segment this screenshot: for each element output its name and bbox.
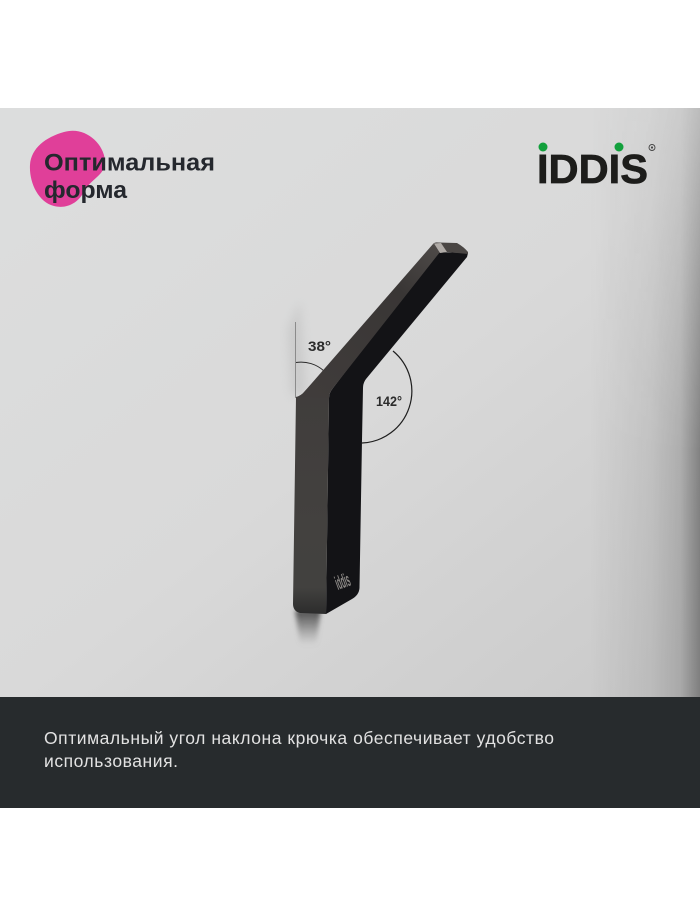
wall photo background xyxy=(0,108,700,697)
title: Оптимальная xyxy=(44,150,215,176)
hook top end cap xyxy=(433,242,468,254)
hook lit diagonal face xyxy=(296,244,440,398)
angle marker: 38 degrees: 38° xyxy=(308,338,331,354)
angle marker: 38 degrees xyxy=(296,322,331,398)
caption text: использования. xyxy=(44,751,178,771)
pink blob behind heading xyxy=(30,131,105,207)
dark caption band xyxy=(0,697,700,808)
title xyxy=(44,150,215,204)
product: black wall hook xyxy=(293,242,468,614)
hook shadow on wall xyxy=(288,300,321,645)
caption text xyxy=(44,728,554,771)
angle marker: 142 degrees xyxy=(362,351,412,443)
engraved iddis mark: iddis xyxy=(332,570,354,595)
angle marker: 142 degrees: 142° xyxy=(376,394,402,409)
hook dark face xyxy=(326,252,468,614)
caption text: Оптимальный угол наклона крючка обеспечивает удобство xyxy=(44,728,554,748)
IDDIS logo: IDDIS xyxy=(537,146,648,192)
hook lit front face xyxy=(293,365,329,614)
title: форма xyxy=(44,177,127,204)
